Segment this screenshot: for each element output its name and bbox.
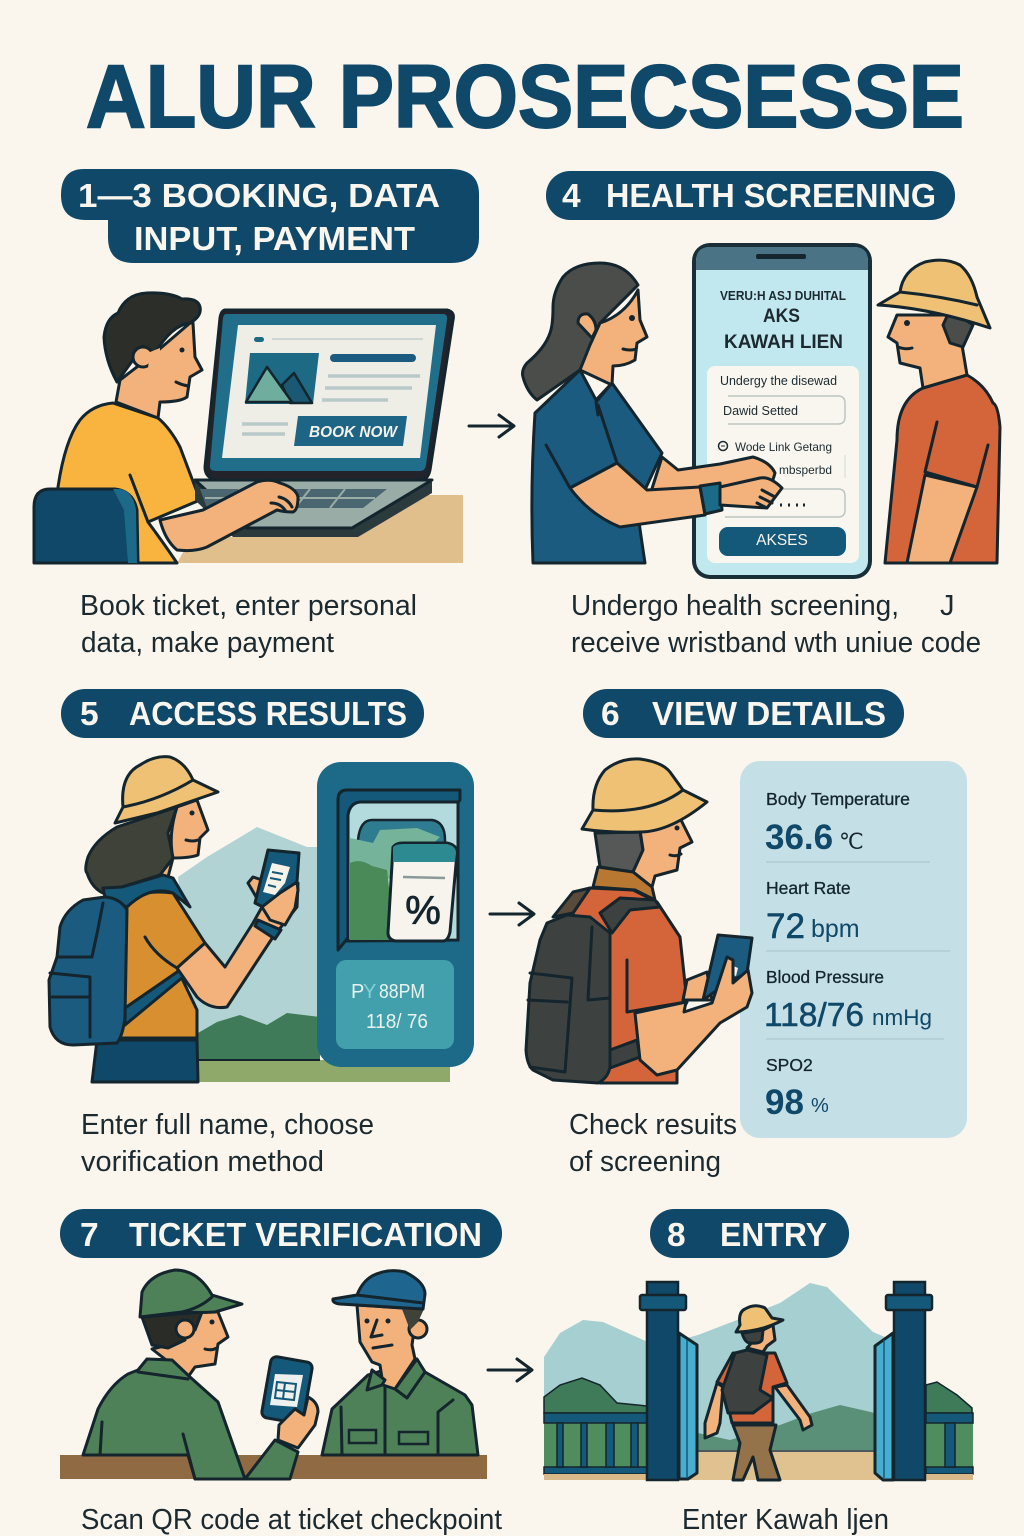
heading: step 8 bbox=[650, 1209, 849, 1258]
title: ALUR PROSECSESSE bbox=[86, 46, 964, 146]
phone: results card: 118/ 76 bbox=[366, 1011, 428, 1033]
panel: step 6 view details: of screening bbox=[569, 1146, 721, 1178]
phone: screening form: AKS bbox=[763, 306, 800, 327]
caption: step 4: Undergo health screening, bbox=[571, 590, 899, 622]
heading: step 5: 5 bbox=[80, 696, 99, 733]
phone: screening form bbox=[692, 243, 872, 579]
heading: step 8: 8 bbox=[667, 1217, 686, 1254]
metric: body temperature: Body Temperature bbox=[766, 789, 910, 809]
heading: steps 1-3: 1—3 BOOKING, DATA bbox=[78, 178, 440, 215]
phone: results card: 88PM bbox=[379, 981, 425, 1003]
panel: step 5 access results bbox=[49, 689, 474, 1178]
heading: step 8: ENTRY bbox=[720, 1217, 827, 1254]
panel: step 4 health screening bbox=[522, 171, 1000, 659]
heading: step 6 bbox=[583, 689, 904, 738]
illustration: person booking on laptop bbox=[34, 293, 463, 563]
panel: steps 1-3 booking bbox=[34, 169, 479, 659]
panel: steps 1-3 booking: data, make payment bbox=[81, 627, 334, 659]
heading: step 5 bbox=[61, 689, 424, 738]
phone: screening form: KAWAH LIEN bbox=[724, 332, 843, 353]
heading: step 5: ACCESS RESULTS bbox=[129, 696, 407, 733]
panel: step 8 entry bbox=[544, 1209, 973, 1536]
arrow: 7 to 8 bbox=[488, 1359, 532, 1381]
panel: step 7 ticket verification bbox=[60, 1209, 502, 1536]
phone: screening form: VERU:H ASJ DUHITAL bbox=[720, 288, 846, 303]
arrow: 5 to 6 bbox=[490, 903, 534, 925]
metric: SPO2: SPO2 bbox=[766, 1055, 813, 1075]
metric: SPO2: % bbox=[811, 1095, 829, 1117]
gate: left post bbox=[640, 1282, 697, 1480]
phone: screening form: Wode Link Getang bbox=[735, 440, 832, 454]
metric: body temperature bbox=[765, 789, 930, 862]
heading: step 6: VIEW DETAILS bbox=[652, 696, 886, 733]
phone: results card: % bbox=[405, 889, 441, 933]
metric: body temperature: 36.6 bbox=[765, 818, 833, 857]
illustration: hiker walking through gate bbox=[705, 1306, 812, 1480]
illustration: hiker woman with phone bbox=[49, 757, 299, 1082]
caption: steps 1-3: Book ticket, enter personal bbox=[80, 590, 417, 622]
phone: results card: P bbox=[351, 981, 364, 1003]
heading: step 7: TICKET VERIFICATION bbox=[129, 1217, 482, 1254]
illustration: man in hat bbox=[878, 260, 1000, 563]
panel: step 4 health screening: receive wristband wth uniue code bbox=[571, 627, 981, 659]
illustration: arms with wristband on phone bbox=[570, 457, 782, 527]
illustration: hiker man with backpack bbox=[526, 759, 752, 1083]
illustration: landscape bbox=[178, 827, 450, 1082]
metric: body temperature: ℃ bbox=[839, 829, 864, 854]
caption: step 8: Enter Kawah ljen bbox=[682, 1504, 889, 1536]
caption: step 5: Enter full name, choose bbox=[81, 1109, 374, 1141]
caption: step 6: Check resuits bbox=[569, 1109, 737, 1141]
gate: right post bbox=[875, 1282, 932, 1480]
panel: step 5 access results: vorification method bbox=[81, 1146, 324, 1178]
illustration: checkpoint counter bbox=[60, 1455, 487, 1479]
illustration: officer left with green cap bbox=[83, 1270, 318, 1479]
illustration: person booking on laptop: BOOK NOW bbox=[309, 424, 399, 441]
heading: step 6: 6 bbox=[601, 696, 620, 733]
phone: results card bbox=[317, 762, 474, 1067]
metric: SPO2: 98 bbox=[765, 1083, 804, 1122]
metric: blood pressure: Blood Pressure bbox=[766, 967, 884, 987]
metric: heart rate: bpm bbox=[811, 915, 860, 943]
metric: blood pressure bbox=[764, 967, 944, 1039]
phone: screening form: Dawid Setted bbox=[723, 403, 798, 418]
metric: blood pressure: nmHg bbox=[872, 1005, 932, 1030]
heading: step 7 bbox=[60, 1209, 502, 1258]
arrow: 1-3 to 4 bbox=[469, 415, 514, 437]
panel: step 4 health screening: J bbox=[940, 590, 954, 622]
card: health metrics bbox=[740, 761, 967, 1138]
panel: step 6 view details bbox=[526, 689, 967, 1178]
metric: SPO2 bbox=[765, 1055, 829, 1122]
metric: blood pressure: 118/76 bbox=[764, 996, 864, 1033]
illustration: woman at kiosk bbox=[522, 263, 662, 563]
metric: heart rate bbox=[766, 878, 950, 951]
phone: screening form: AKSES bbox=[756, 532, 808, 549]
heading: step 4 bbox=[546, 171, 955, 220]
caption: step 7: Scan QR code at ticket checkpoint bbox=[81, 1504, 502, 1536]
heading: step 4: HEALTH SCREENING bbox=[606, 178, 936, 215]
illustration: officer right with blue cap bbox=[322, 1271, 478, 1455]
metric: heart rate: 72 bbox=[766, 907, 805, 946]
heading: steps 1-3: INPUT, PAYMENT bbox=[134, 221, 416, 258]
heading: step 7: 7 bbox=[80, 1217, 99, 1254]
phone: results card: Y bbox=[363, 981, 376, 1003]
heading: steps 1-3 bbox=[61, 169, 479, 263]
phone: screening form: mbsperbd bbox=[779, 463, 832, 477]
illustration: gate scene bbox=[544, 1283, 973, 1480]
phone: screening form: Undergy the disewad bbox=[720, 373, 837, 388]
heading: step 4: 4 bbox=[562, 178, 581, 215]
metric: heart rate: Heart Rate bbox=[766, 878, 851, 898]
